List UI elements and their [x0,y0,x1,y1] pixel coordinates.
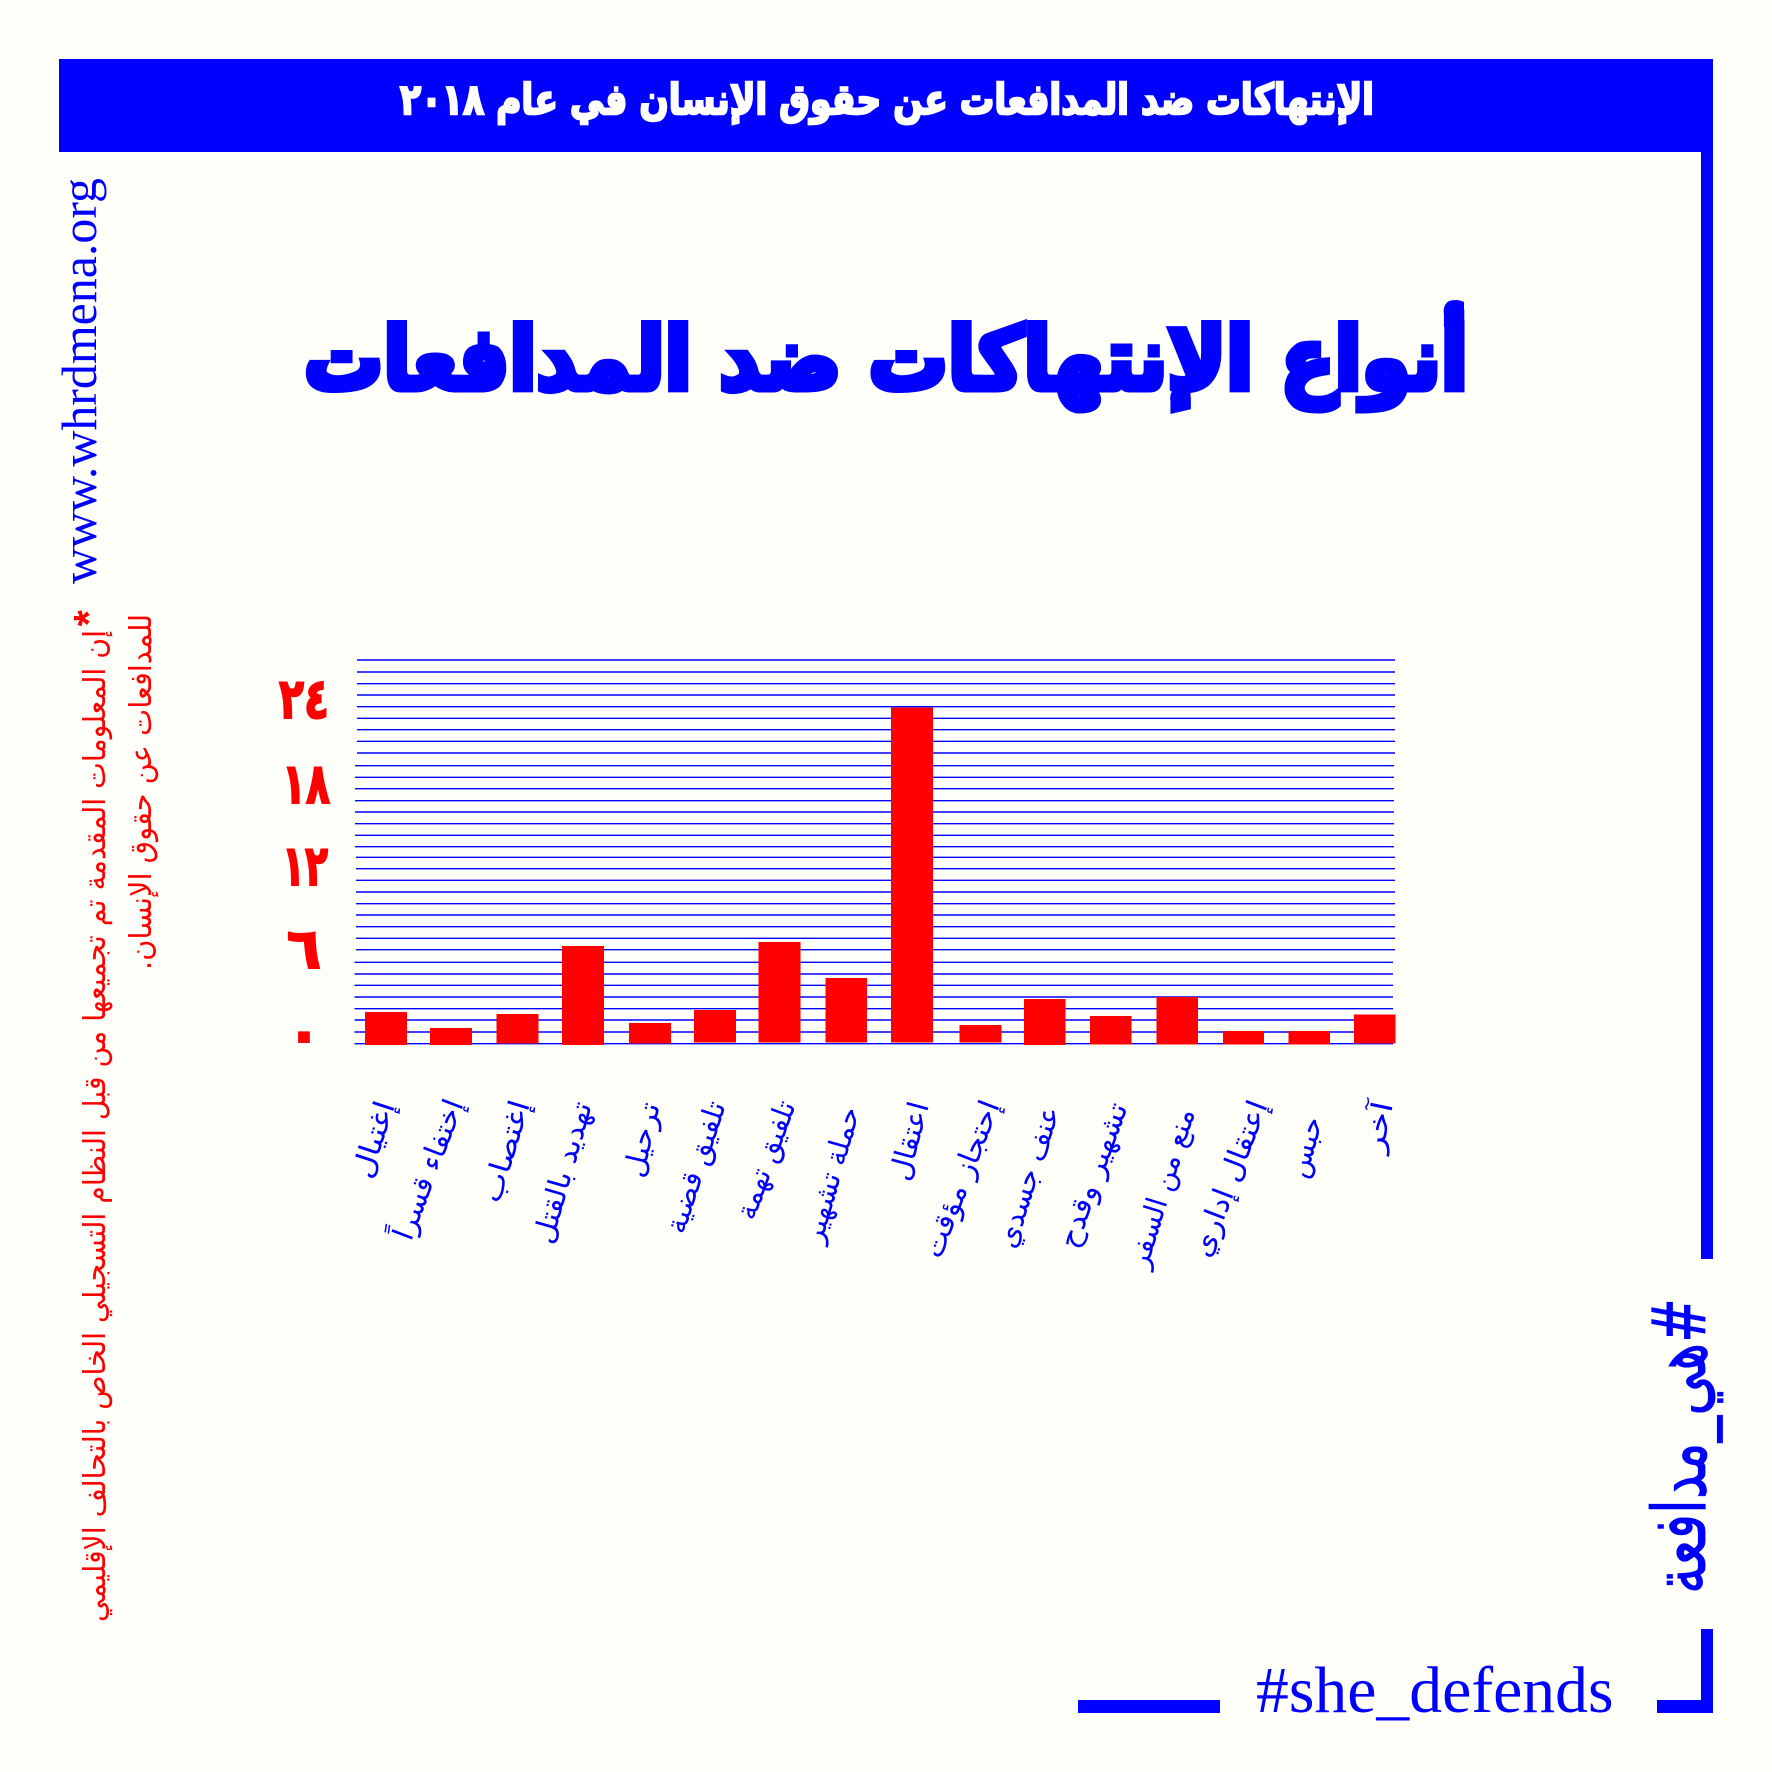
x axis labels: تشهير وقدح [1051,1098,1135,1252]
y axis labels: ٠ [287,1002,321,1067]
x axis labels: عنف جسدي [989,1102,1067,1252]
x axis labels: إعتقال إداري [1184,1095,1275,1262]
x axis labels [345,1093,1400,1274]
bar chart [279,660,1400,1274]
frame: right bar [1701,152,1713,1259]
note line 1: إن المعلومات المقدمة تم تجميعها من قبل النظام التسجيلي الخاص بالتحالف الإقليمي [78,630,113,1622]
y axis labels: ١٨ [282,752,330,817]
x axis labels: حبس [1280,1113,1330,1182]
x axis labels: إختفاء قسراً [383,1093,471,1245]
x axis labels: آخر [1355,1096,1400,1158]
bars [365,708,1396,1045]
header title: الإنتهاكات ضد المدافعات عن حقوق الإنسان في عام ٢٠١٨ [400,75,1374,125]
note line 2: للمدافعات عن حقوق الإنسان. [124,614,159,970]
x axis labels: تلفيق قضية [658,1097,733,1237]
note asterisk: * [65,609,112,626]
website url: www.whrdmena.org [51,178,107,584]
note: data source [65,609,159,1622]
x axis labels: إحتجاز مؤقت [915,1095,1007,1263]
hashtag english: #she_defends [1256,1654,1614,1727]
y axis labels: ١٢ [282,834,328,899]
frame: bottom bar [1078,1700,1220,1713]
x axis labels: إغتصاب [473,1096,538,1207]
y axis labels: ٢٤ [279,667,329,732]
hashtag arabic vertical: #هي_مدافعة [1637,1298,1723,1594]
x axis labels: ترحيل [617,1099,667,1181]
x axis labels: تهديد بالقتل [526,1098,599,1247]
main title: أنواع الإنتهاكات ضد المدافعات [304,303,1468,411]
x axis labels: منع من السفر [1120,1104,1202,1274]
x axis labels: إغتيال [345,1097,403,1183]
header band [59,59,1713,152]
y axis labels [279,667,330,1067]
x axis labels: اعتقال [882,1098,936,1184]
x axis labels: تلفيق تهمة [728,1096,803,1224]
frame: bottom right corner [1657,1629,1713,1713]
y axis labels: ٦ [287,917,321,982]
grid lines [354,660,1395,1044]
x axis labels: حملة تشهير [795,1103,867,1248]
